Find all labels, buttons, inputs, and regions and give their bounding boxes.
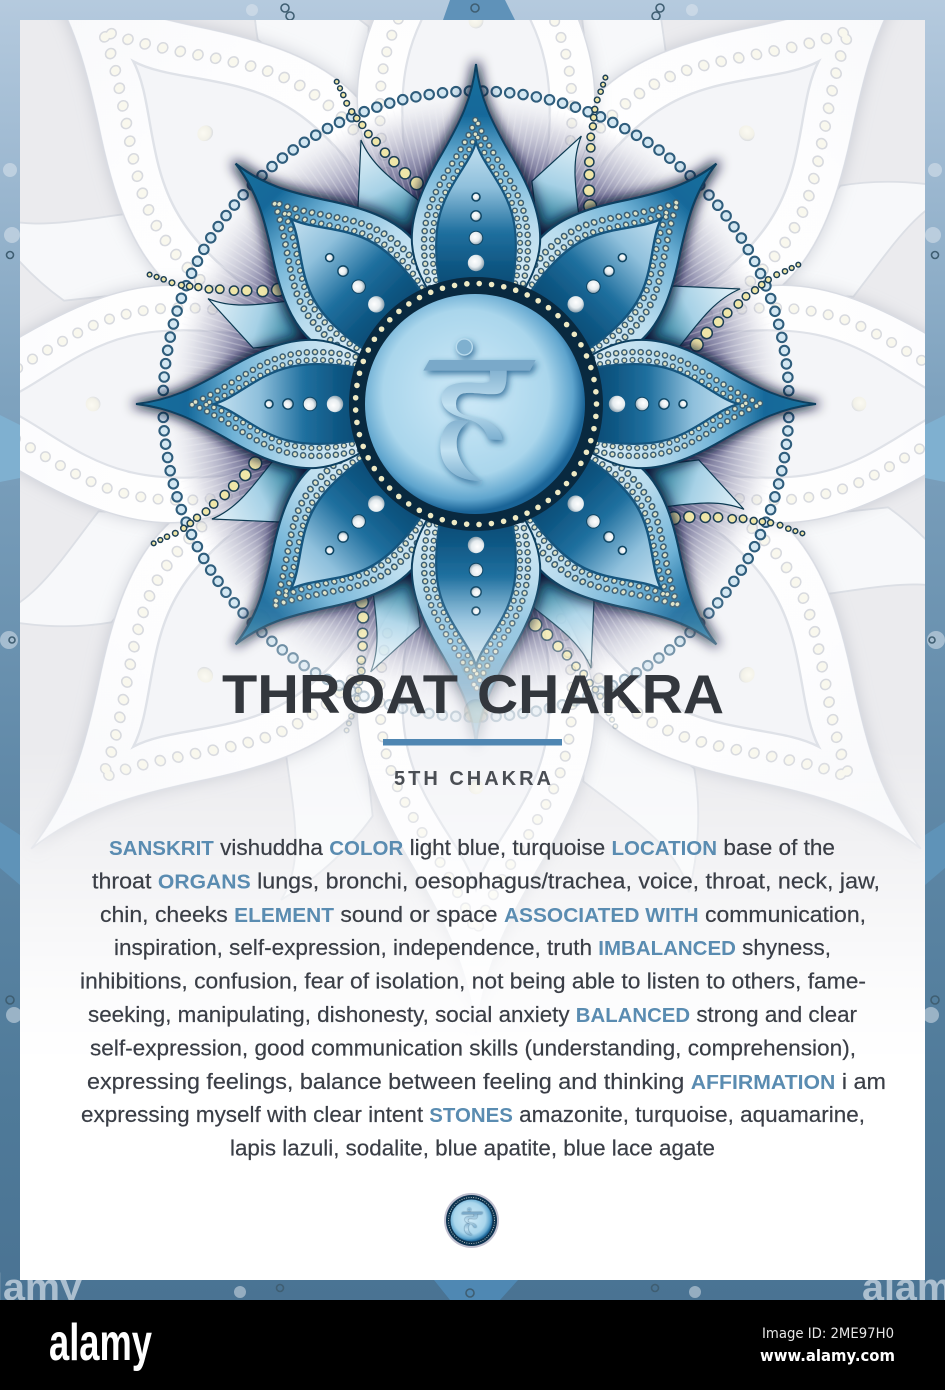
text block: chakra attributes: self-expression, good communication skills (understanding, comprehension), [90, 1035, 856, 1060]
title: CHAKRA [477, 663, 724, 725]
icon: ham bija symbol [423, 339, 536, 481]
footer bar [0, 1300, 945, 1390]
text block: chakra attributes: expressing myself with clear intent STONES amazonite, turquoise, aquamarine, [81, 1102, 865, 1127]
background: large pale mandala [20, 20, 925, 914]
image id: Image ID: 2ME97H0 [762, 1326, 894, 1342]
text block: chakra attributes: seeking, manipulating, dishonesty, social anxiety BALANCED strong and clear [88, 1002, 857, 1027]
text block: chakra attributes: SANSKRIT vishuddha COLOR light blue, turquoise LOCATION base of the [109, 835, 835, 860]
site url: www.alamy.com [760, 1346, 895, 1365]
text block: chakra attributes: expressing feelings, balance between feeling and thinking AFFIRMATION i am [87, 1069, 886, 1094]
center disc [349, 277, 603, 531]
divider rule [383, 739, 562, 746]
ring of beads [163, 91, 789, 717]
text block: chakra attributes: chin, cheeks ELEMENT sound or space ASSOCIATED WITH communication, [100, 902, 866, 927]
text block: chakra attributes: throat ORGANS lungs, bronchi, oesophagus/trachea, voice, throat, neck, jaw, [92, 868, 880, 893]
text block: chakra attributes: lapis lazuli, sodalite, blue apatite, blue lace agate [230, 1136, 715, 1161]
title: THROAT [222, 663, 458, 725]
icon: small chakra medallion [444, 1193, 499, 1248]
title [222, 663, 724, 725]
lotus petals [136, 64, 816, 744]
text block: chakra attributes: inhibitions, confusion, fear of isolation, not being able to listen to others, fame- [80, 969, 866, 994]
subtitle: 5TH CHAKRA [394, 768, 551, 790]
text block: chakra attributes [80, 835, 886, 1161]
sepals and gold bead lines [146, 74, 806, 734]
logo: alamy: alamy [49, 1314, 152, 1372]
lotus flower [136, 64, 816, 744]
fade to white toward text [20, 808, 925, 1280]
text block: chakra attributes: inspiration, self-expression, independence, truth IMBALANCED shyness, [114, 935, 831, 960]
rays behind the lotus [171, 99, 781, 709]
